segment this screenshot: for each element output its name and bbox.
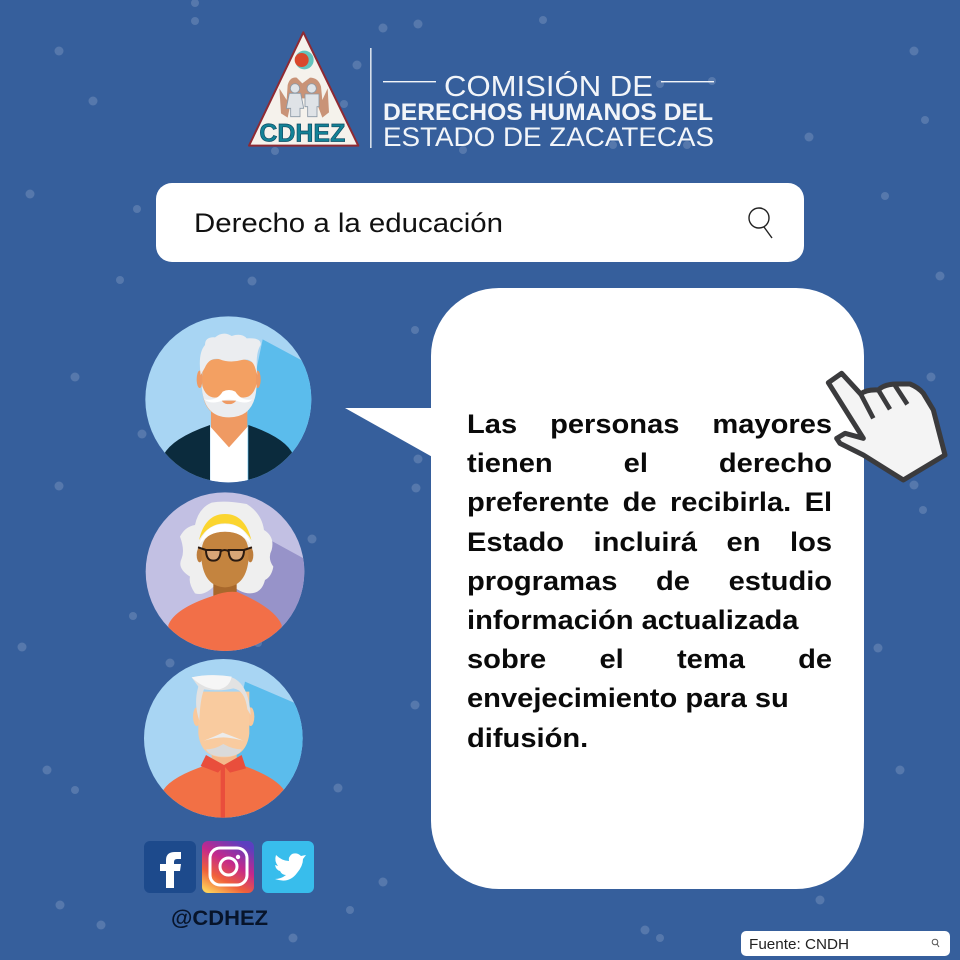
icon: Facebook (144, 841, 196, 893)
source search box (741, 931, 950, 956)
paragraph text (467, 409, 832, 752)
paragraph text: preferente de recibirla. El (467, 487, 832, 517)
social handle: @CDHEZ (171, 906, 268, 930)
search bar (156, 183, 804, 262)
avatar: older man with beard and dark jacket (143, 313, 317, 487)
icon: Twitter (262, 841, 314, 893)
paragraph text: programas de estudio (467, 566, 832, 596)
avatar: older man with white hair and red shirt (143, 658, 303, 820)
logo wordmark (383, 70, 714, 152)
logo divider (370, 48, 372, 148)
speech bubble (345, 288, 864, 889)
logo wordmark: ESTADO DE ZACATECAS (383, 122, 714, 152)
paragraph text: Las personas mayores (467, 409, 832, 439)
avatar: older woman with headband and glasses (143, 490, 307, 657)
search bar: Derecho a la educación (194, 208, 503, 238)
logo: CDHEZ triangle emblem (249, 32, 358, 148)
icon: pointing hand cursor (828, 373, 945, 480)
icon: magnifying glass (749, 208, 772, 238)
paragraph text: envejecimiento para su (467, 683, 789, 713)
source search box: Fuente: CNDH (749, 937, 849, 953)
logo wordmark: COMISIÓN DE (444, 70, 653, 103)
icon: Instagram (202, 841, 254, 893)
paragraph text: información actualizada (467, 605, 798, 635)
logo: CDHEZ triangle emblem: CDHEZ (259, 120, 345, 148)
paragraph text: difusión. (467, 722, 588, 752)
paragraph text: tienen el derecho (467, 448, 832, 478)
paragraph text: Estado incluirá en los (467, 527, 832, 557)
logo wordmark: DERECHOS HUMANOS DEL (383, 99, 713, 126)
paragraph text: sobre el tema de (467, 644, 832, 674)
